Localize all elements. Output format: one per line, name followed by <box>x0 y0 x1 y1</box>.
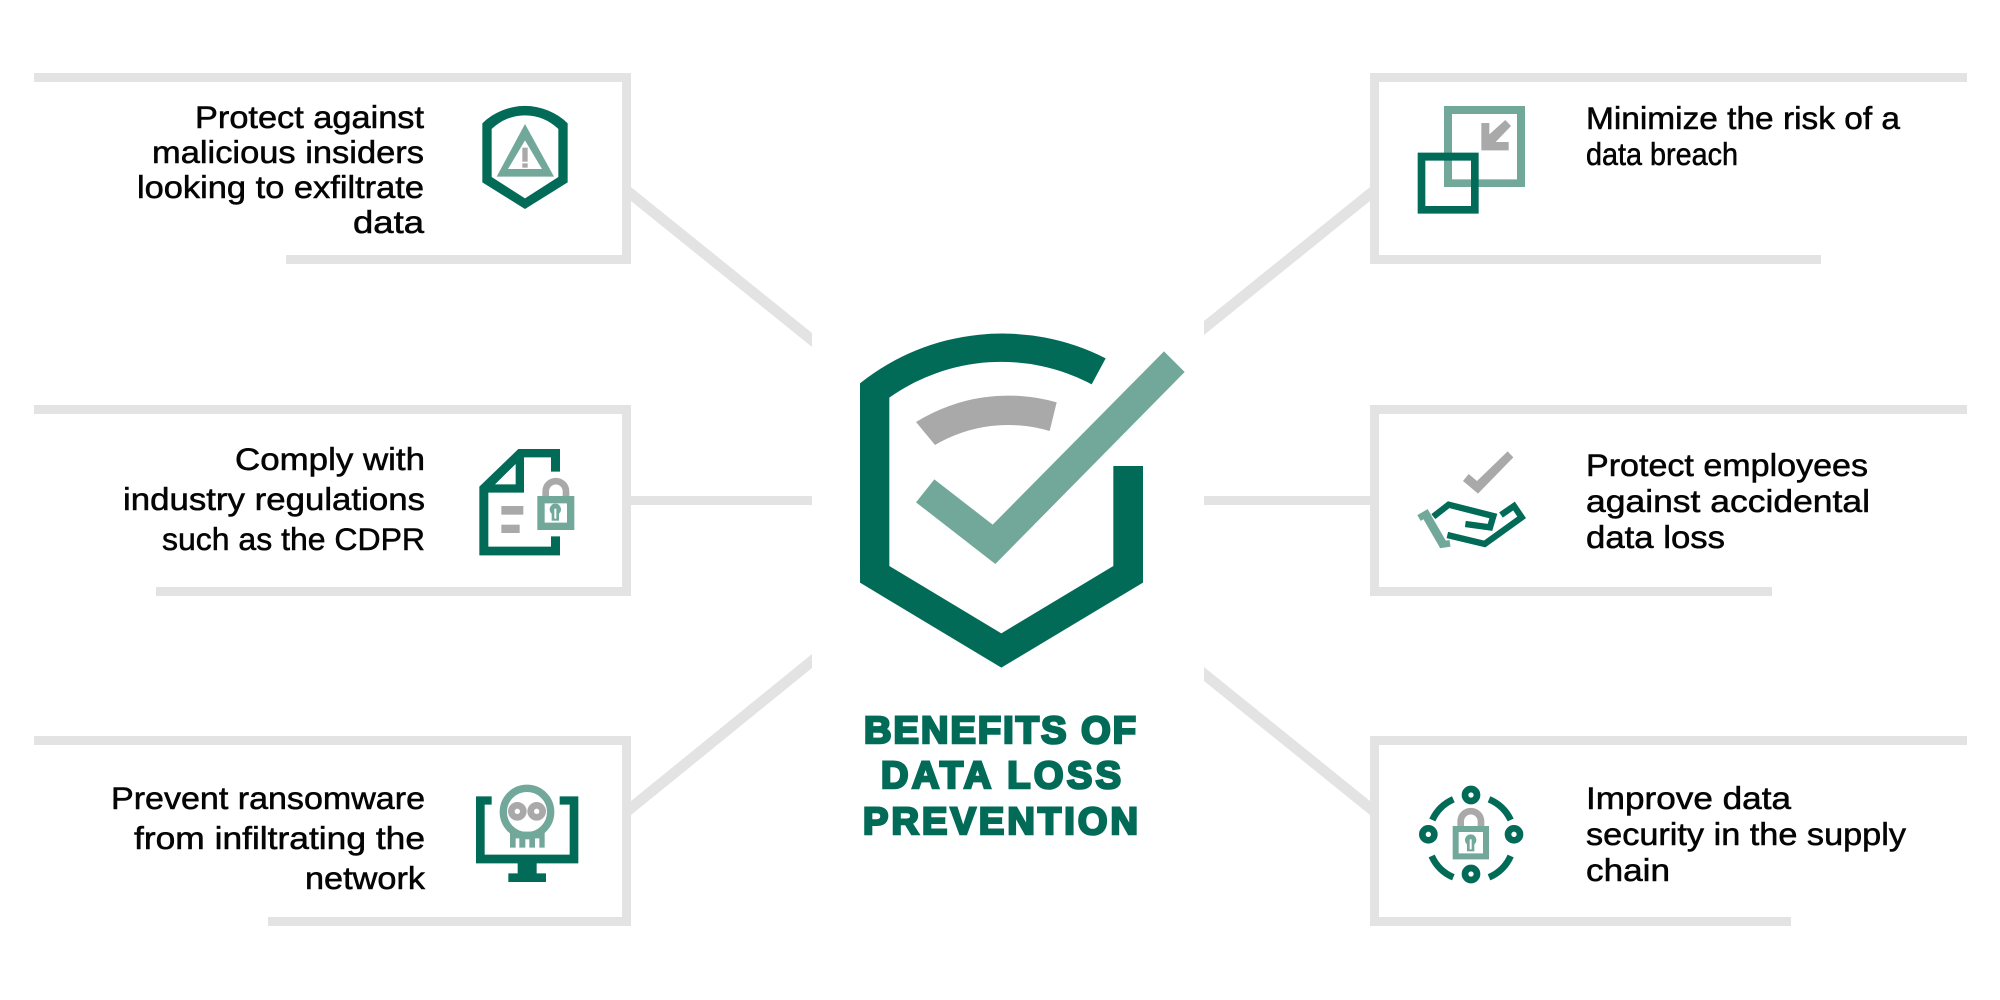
title: DATA LOSS <box>881 755 1121 797</box>
text: minimize the risk of a data breach: data breach <box>1586 136 1738 172</box>
check mark <box>916 351 1185 564</box>
panel: protect employees against accidental data loss <box>1370 405 1967 596</box>
text: protect employees: data loss <box>1586 519 1725 555</box>
icon: hand with check <box>1419 451 1522 545</box>
text: comply with industry regulations: industry regulations <box>123 481 425 517</box>
central shield icon <box>860 334 1185 668</box>
icon: lock in a supply chain ring <box>1422 789 1520 880</box>
text: prevent ransomware <box>111 780 425 896</box>
icon: shield warning <box>482 106 568 209</box>
text: prevent ransomware: from infiltrating the <box>134 820 425 856</box>
text: protect against malicious insiders: Protect against <box>195 99 424 135</box>
connector lines <box>631 187 1370 815</box>
text: protect against malicious insiders: looking to exfiltrate <box>137 169 424 205</box>
panel: protect against malicious insiders <box>34 73 631 264</box>
text: prevent ransomware: Prevent ransomware <box>111 780 425 816</box>
text: improve data security: security in the supply <box>1586 816 1906 852</box>
panel: improve data security in the supply chain <box>1370 736 1967 926</box>
shield outline <box>860 334 1143 668</box>
title <box>863 710 1138 843</box>
title: BENEFITS OF <box>864 710 1136 752</box>
text: prevent ransomware: network <box>305 860 425 896</box>
text: improve data security <box>1586 780 1906 888</box>
gray arc <box>916 396 1057 445</box>
text: protect employees: Protect employees <box>1586 447 1868 483</box>
text: protect employees <box>1586 447 1870 555</box>
text: comply with industry regulations: such as the CDPR <box>162 521 425 557</box>
text: minimize the risk of a data breach <box>1586 100 1901 172</box>
text: improve data security: chain <box>1586 852 1670 888</box>
text: protect employees: against accidental <box>1586 483 1870 519</box>
text: protect against malicious insiders: data <box>353 204 425 240</box>
icon: overlapping squares with arrow <box>1418 106 1525 214</box>
icon: monitor with skull <box>476 788 578 882</box>
text: comply with industry regulations <box>123 441 425 557</box>
panel: comply with industry regulations <box>34 405 631 596</box>
panel: minimize the risk of a data breach <box>1370 73 1967 264</box>
text: improve data security: Improve data <box>1586 780 1792 816</box>
text: protect against malicious insiders <box>137 99 425 240</box>
text: minimize the risk of a data breach: Minimize the risk of a <box>1586 100 1901 136</box>
title: PREVENTION <box>863 801 1138 843</box>
text: comply with industry regulations: Comply with <box>235 441 425 477</box>
text: protect against malicious insiders: malicious insiders <box>152 134 424 170</box>
panel: prevent ransomware <box>34 736 631 926</box>
icon: document with lock <box>479 449 574 555</box>
